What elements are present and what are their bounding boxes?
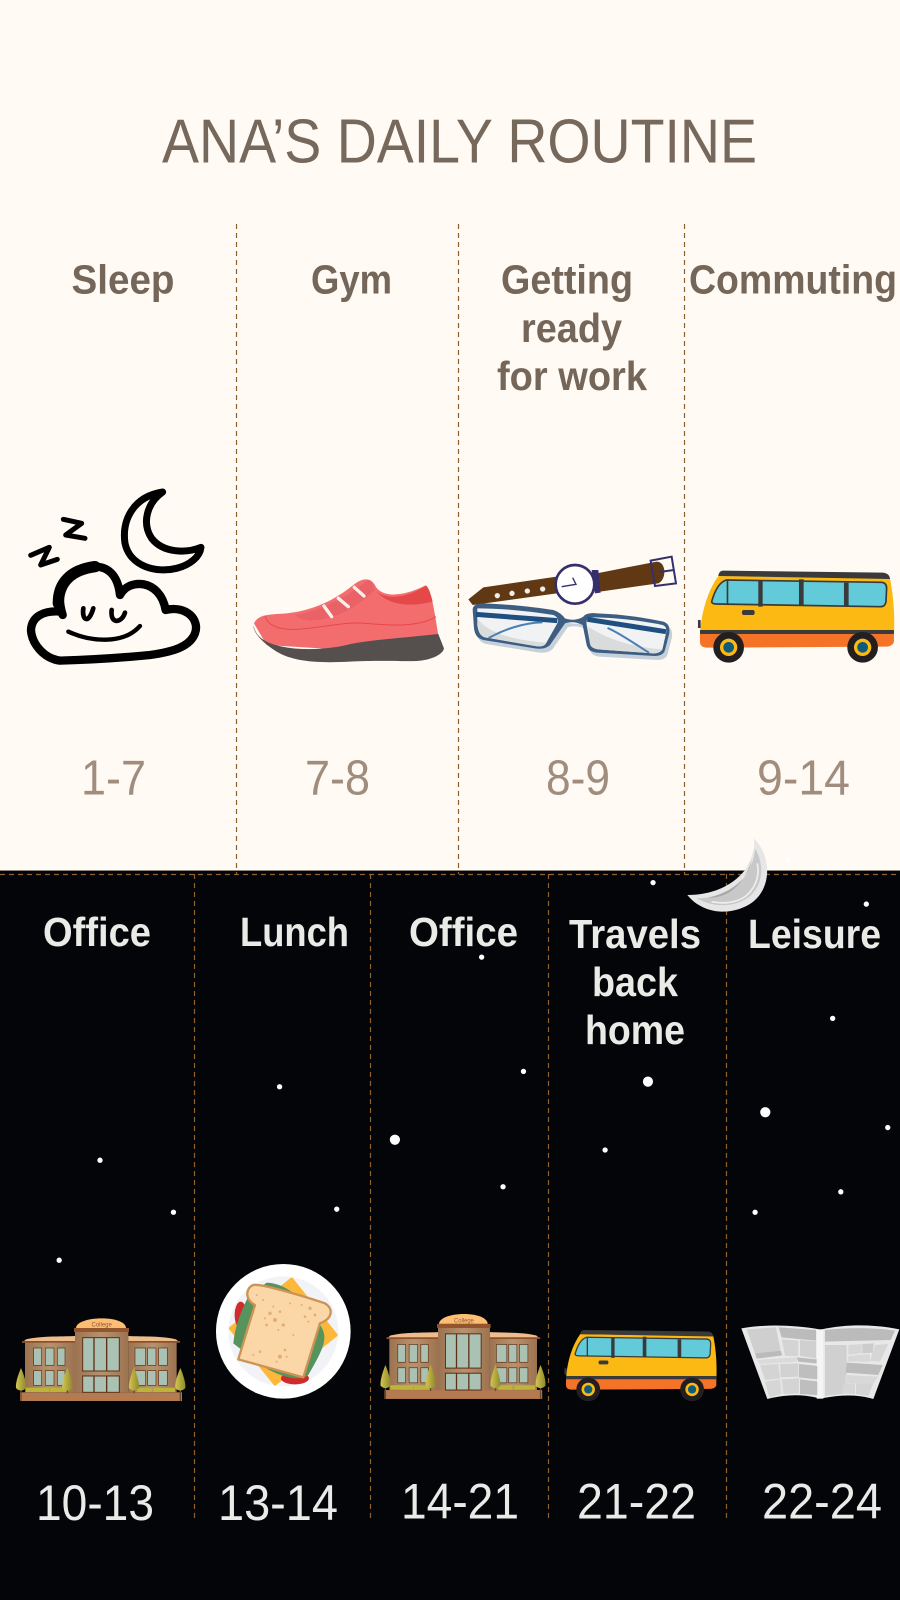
number: 7-8: 7-8 [305,752,370,806]
heading: Getting ready for work: Getting [501,256,633,302]
icon: newspaper [741,1325,899,1399]
heading: Office: Office [43,909,151,955]
heading: Gym: Gym [311,256,392,302]
icon: college building: College [92,1323,112,1329]
icon: college building afternoon: College [454,1318,475,1325]
number: 1-7: 1-7 [81,752,146,806]
heading: Leisure: Leisure [748,911,881,957]
heading: Office afternoon: Office [409,909,518,955]
number: 22-24: 22-24 [762,1473,882,1529]
number: 14-21: 14-21 [401,1473,519,1529]
heading: Travels back home: Travels [569,911,701,957]
icon: watch and glasses [468,557,676,660]
heading: Sleep: Sleep [72,256,174,302]
number: 10-13: 10-13 [36,1475,154,1531]
heading: Travels back home: home [585,1007,685,1053]
heading: Getting ready for work: ready [521,305,622,351]
title: ANA’S DAILY ROUTINE [162,108,757,177]
icon: commuter bus [698,571,894,663]
icon: running shoe [253,579,444,662]
icon: return bus [564,1330,717,1401]
icon: sandwich on plate [216,1264,351,1399]
icon: sleeping cloud and moon [31,492,201,661]
heading: Getting ready for work: for work [497,353,647,399]
number: 21-22: 21-22 [577,1473,696,1529]
heading: Lunch: Lunch [240,909,349,955]
number: 9-14: 9-14 [757,752,850,806]
icon: college building [16,1318,185,1401]
number: 8-9: 8-9 [546,752,610,806]
night stars [57,880,890,1263]
panel: night background [0,870,900,1600]
number: 13-14: 13-14 [218,1475,338,1531]
heading: Getting ready for work [497,256,647,399]
icon: college building afternoon [380,1314,546,1399]
icon: crescent moon [687,838,791,912]
heading: Travels back home: back [592,959,678,1005]
panel: day background [0,0,900,870]
heading: Travels back home [569,911,701,1053]
